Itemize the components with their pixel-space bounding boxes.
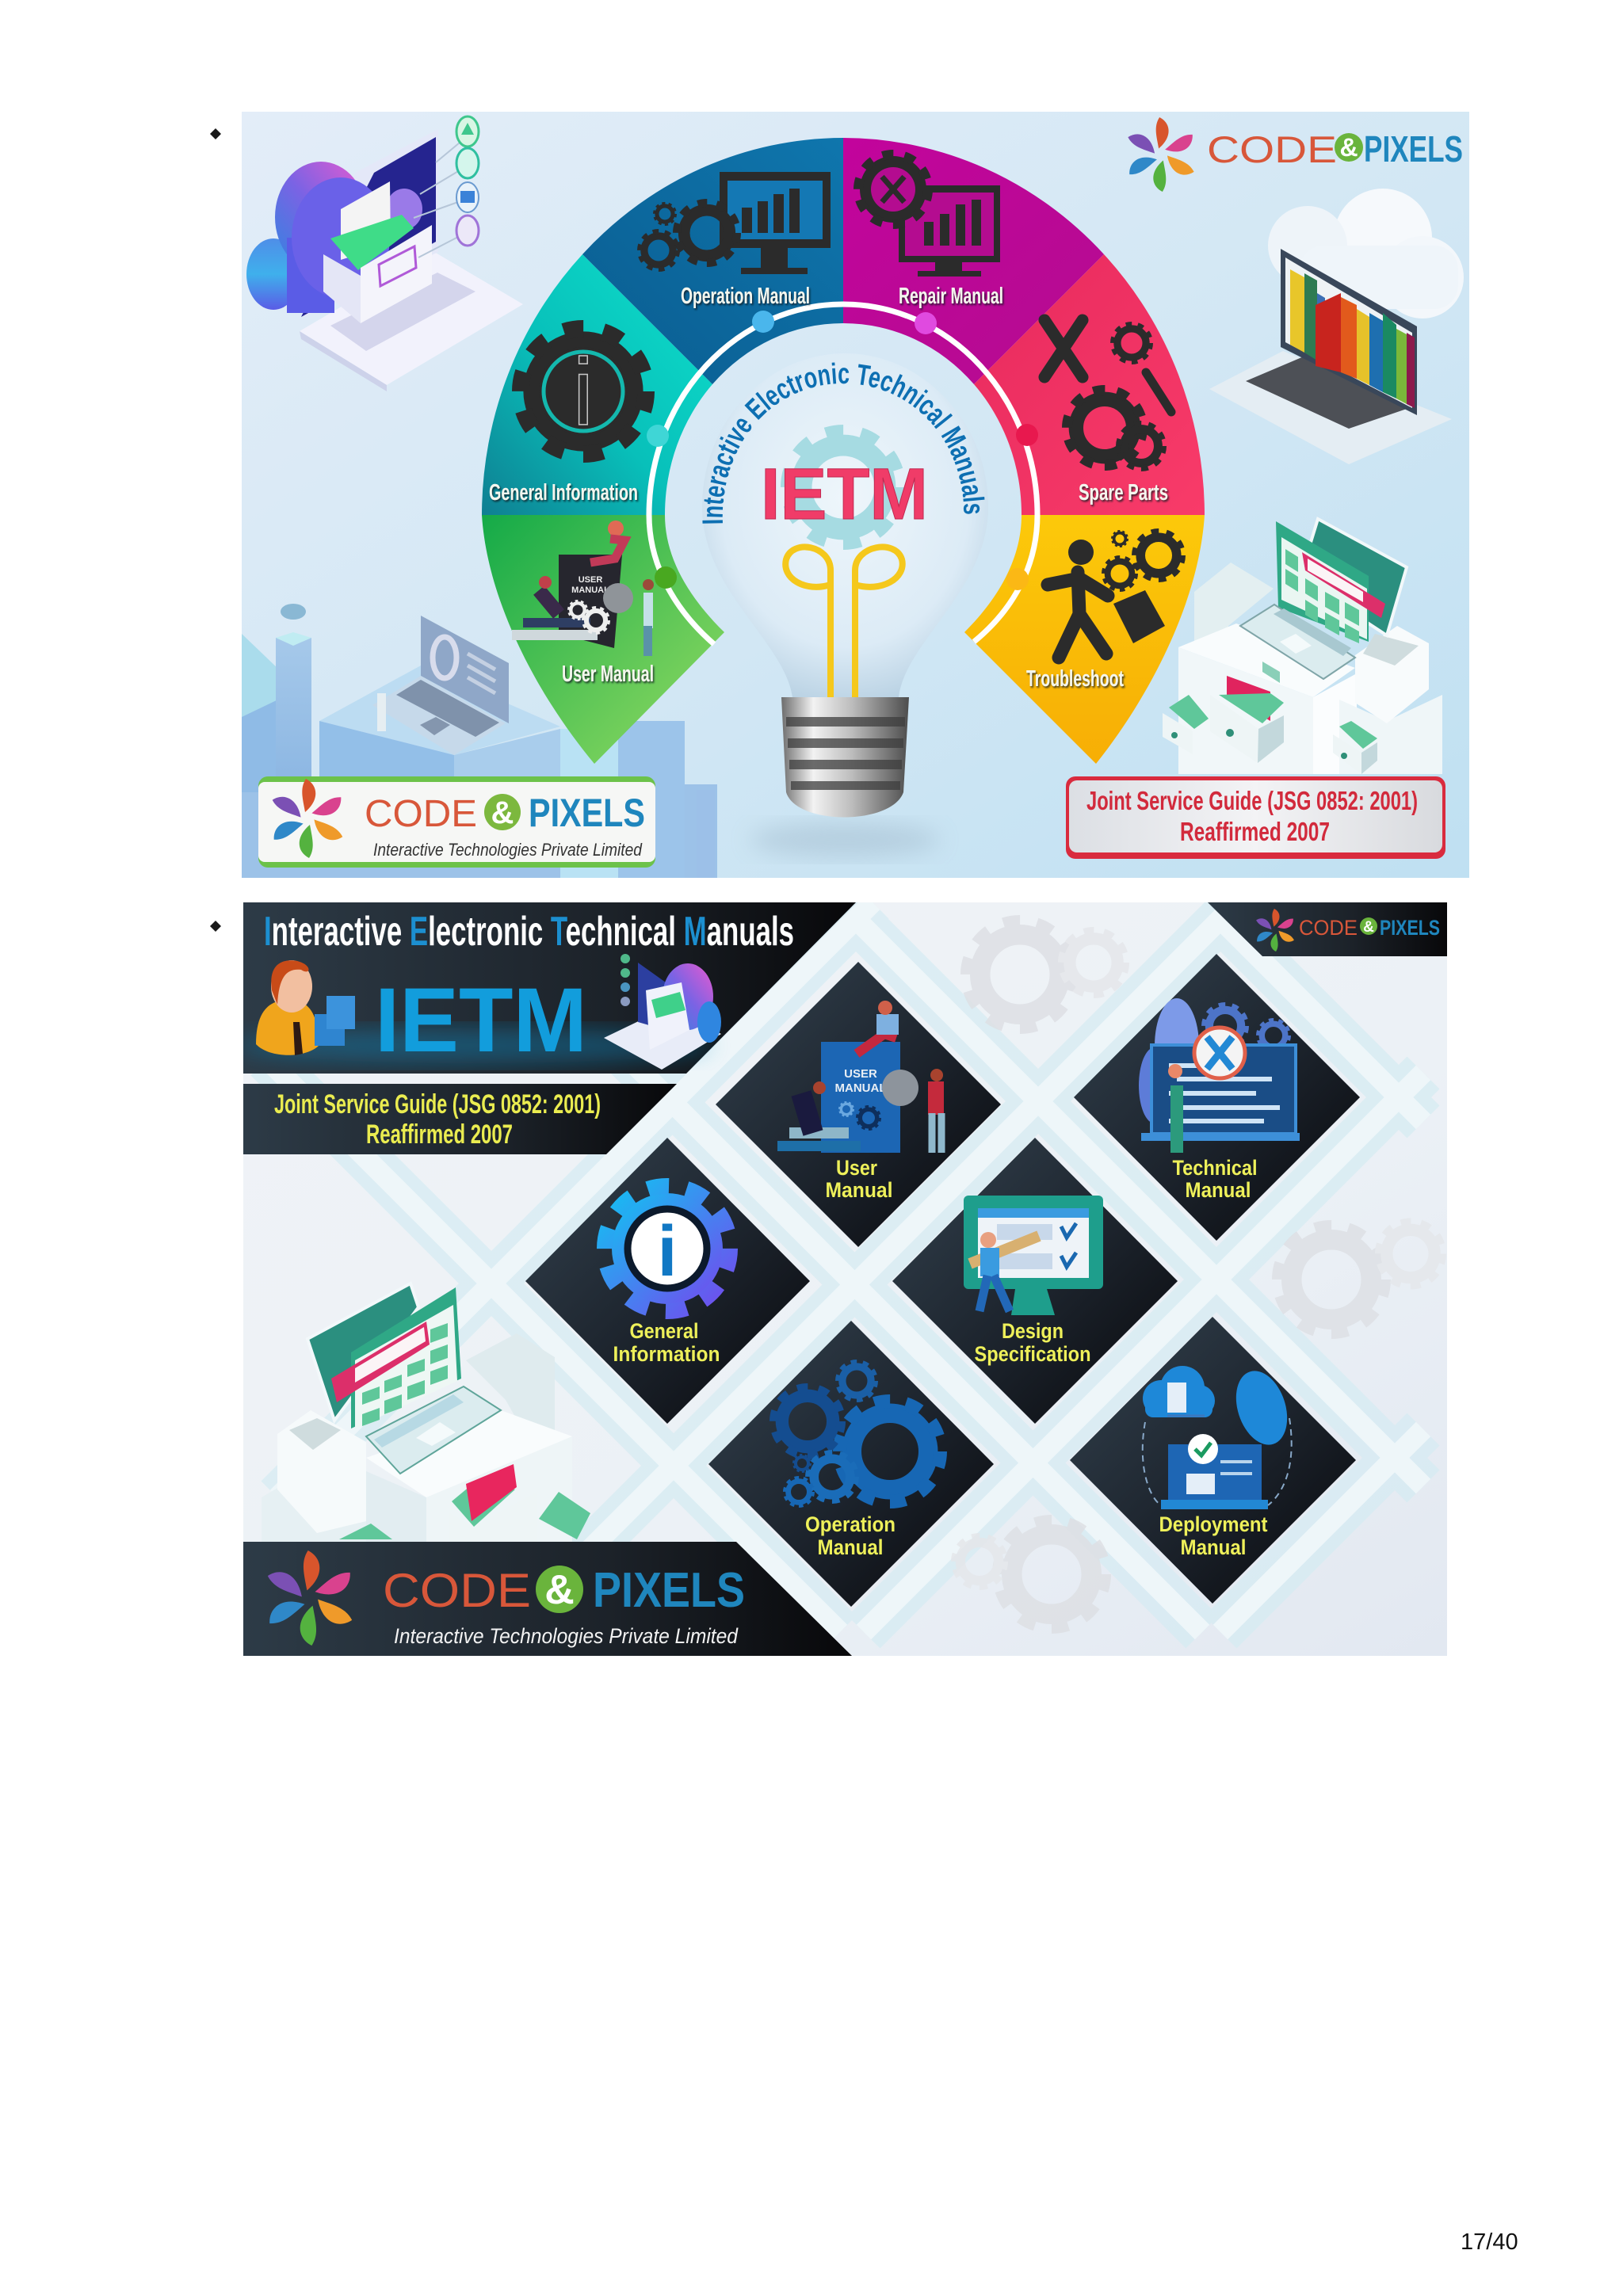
label — [826, 1156, 892, 1202]
bulb shadow — [750, 822, 940, 857]
callout: Joint Service Guide card — [1066, 776, 1445, 859]
segment: Troubleshoot — [964, 515, 1205, 764]
icon: cloud, hand and laptop — [1143, 1364, 1296, 1509]
banner: bottom left logo: Interactive Technologies Private Limited — [394, 1624, 739, 1648]
drawers — [1163, 662, 1377, 774]
panel: IETM diamonds — [238, 902, 1447, 1656]
label — [805, 1512, 896, 1559]
diamond: Design Specification — [892, 1138, 1178, 1424]
diamond: Technical Manual — [1074, 954, 1360, 1241]
diamond: Operation Manual — [708, 1321, 994, 1607]
bullet 2 — [210, 921, 221, 932]
filament — [785, 547, 903, 697]
icon: operation monitor and gears — [640, 172, 831, 274]
logo card: bottom left: PIXELS — [529, 791, 645, 835]
icon: user manual book: USER — [579, 575, 602, 585]
icon: user manual book — [512, 521, 654, 656]
segment: General Information — [482, 254, 712, 515]
logo card: bottom left: CODE — [365, 793, 477, 835]
label: Design — [1002, 1319, 1064, 1343]
chart: six-segment wheel — [482, 138, 1205, 764]
label — [1159, 1512, 1268, 1559]
icon: monitor and wrench badge — [1139, 998, 1300, 1153]
label: Information — [613, 1342, 720, 1366]
glass — [702, 353, 988, 697]
banner: top right logo: CODE — [1299, 916, 1358, 940]
banner: top left title — [238, 902, 856, 1074]
mini laptop with cloud — [604, 954, 721, 1070]
glow behind IETM — [238, 1028, 713, 1063]
logo: top right — [1125, 117, 1463, 192]
illustration: laptop with cloud and file box — [246, 116, 523, 391]
white desk blocks — [262, 1333, 572, 1542]
banner: Joint Service Guide: Reaffirmed 2007 — [366, 1119, 513, 1150]
bulb — [702, 353, 988, 857]
illustration: laptop with books and cloud — [1209, 189, 1464, 464]
screw base — [781, 697, 909, 818]
banner: bottom left logo — [243, 1542, 852, 1656]
label: Manual — [1181, 1535, 1246, 1559]
icon: user manual book: USER — [844, 1067, 877, 1081]
icon: user manual book — [777, 1001, 944, 1153]
IETM wordmark: IETM — [375, 970, 587, 1071]
logo card: bottom left: Interactive Technologies Private Limited — [373, 840, 643, 860]
logo: top right: PIXELS — [1364, 128, 1463, 170]
icon: troubleshooting runner — [1048, 531, 1182, 658]
illustration: isometric files and laptop — [262, 1283, 590, 1542]
illustration: pale gear watermarks — [954, 922, 1442, 1627]
label: User Manual: User Manual — [562, 662, 654, 687]
IETM wordmark: IETM — [761, 454, 928, 535]
callout: Joint Service Guide card: Joint Service Guide (JSG 0852: 2001) — [1086, 786, 1418, 815]
icon: information gear: i — [573, 339, 594, 445]
gear watermark — [788, 432, 899, 543]
logo: top right: & — [1339, 133, 1358, 162]
banner: top right logo — [1208, 902, 1447, 956]
logo card: bottom left — [258, 776, 655, 868]
title: Interactive Electronic Technical Manuals — [264, 909, 794, 955]
segment: Operation Manual — [582, 138, 843, 384]
page number: 17/40 — [1461, 2229, 1518, 2255]
icon: repair monitor and gear — [858, 154, 1000, 277]
label: Manual — [818, 1535, 883, 1559]
banner: bottom left logo: PIXELS — [593, 1563, 745, 1618]
label: Operation — [805, 1512, 896, 1536]
banner: bottom left logo: CODE — [383, 1564, 531, 1617]
icon: blue gears — [774, 1362, 940, 1506]
icon: user manual book: MANUAL — [571, 585, 609, 595]
diamond: User Manual — [716, 962, 1001, 1247]
segment: Spare Parts — [974, 254, 1205, 515]
label: Deployment — [1159, 1512, 1268, 1536]
logo card: bottom left: & — [491, 795, 514, 830]
background lattice — [267, 902, 1423, 1632]
label: Operation Manual: Operation Manual — [681, 284, 810, 309]
white desk blocks — [1178, 563, 1442, 774]
label — [975, 1319, 1090, 1366]
segment: User Manual — [482, 515, 724, 764]
label: Technical — [1173, 1156, 1257, 1180]
banner: bottom left logo: & — [544, 1567, 575, 1613]
label: Manual — [826, 1178, 892, 1202]
laptop — [307, 1283, 501, 1474]
label: User — [836, 1156, 877, 1180]
label: Manual — [1186, 1178, 1251, 1202]
label: General Information: General Information — [489, 480, 638, 505]
drawers — [339, 1464, 590, 1542]
banner: top right logo: & — [1363, 919, 1374, 936]
banner: Joint Service Guide — [243, 1084, 677, 1154]
illustration: isometric files and laptop — [1163, 519, 1442, 774]
icon: info gear: i — [657, 1212, 678, 1291]
callout: Joint Service Guide card: Reaffirmed 2007 — [1180, 817, 1330, 846]
illustration: isometric city scene — [242, 604, 717, 878]
icon: user manual book: MANUAL — [835, 1081, 886, 1095]
person icon — [256, 960, 355, 1055]
bullet 1 — [210, 128, 221, 139]
banner: top right logo: PIXELS — [1380, 916, 1440, 940]
diamond: General Information — [525, 1138, 810, 1424]
label: Spare Parts: Spare Parts — [1079, 480, 1168, 505]
banner: Joint Service Guide: Joint Service Guide (JSG 0852: 2001) — [274, 1089, 601, 1119]
curved title: Interactive Electronic Technical Manuals — [702, 363, 984, 524]
label: General — [629, 1319, 699, 1343]
ring with dots — [647, 304, 1038, 644]
label: Troubleshoot: Troubleshoot — [1026, 666, 1124, 692]
icon: information gear — [521, 329, 646, 454]
panel: IETM light bulb wheel — [242, 112, 1469, 878]
label: Repair Manual: Repair Manual — [899, 284, 1003, 309]
diamond: Deployment Manual — [1070, 1317, 1356, 1604]
laptop — [1240, 519, 1407, 679]
logo: top right: CODE — [1207, 128, 1337, 170]
icon: info gear — [605, 1186, 730, 1311]
label — [1173, 1156, 1257, 1202]
label — [613, 1319, 720, 1366]
label: Specification — [975, 1342, 1090, 1366]
icon: spare parts wrenches and gears — [1044, 320, 1171, 468]
icon: monitor with checklist — [964, 1196, 1103, 1315]
segment: Repair Manual — [843, 138, 1104, 384]
